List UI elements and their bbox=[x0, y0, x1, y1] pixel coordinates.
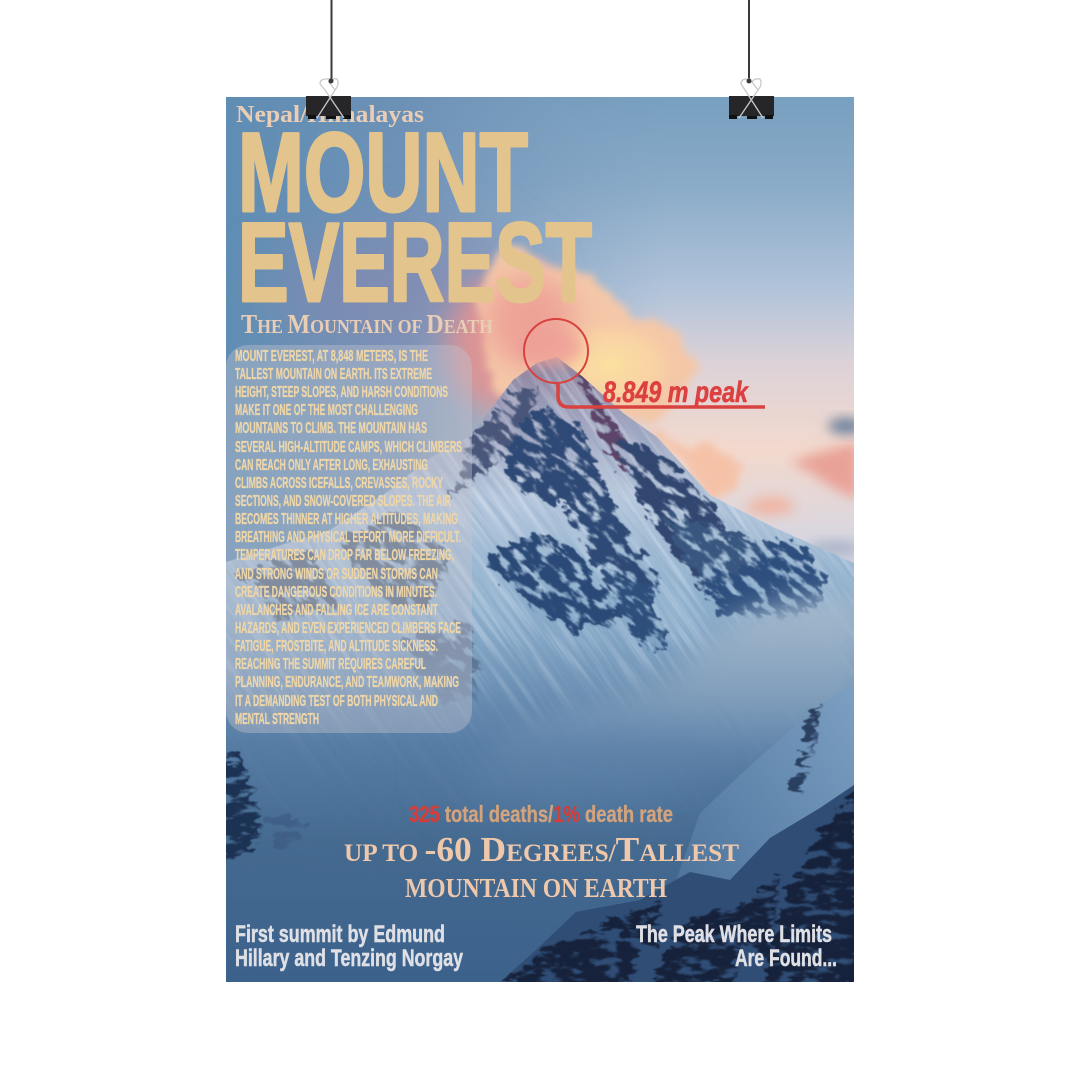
left foreground rock bbox=[226, 757, 310, 860]
binder clip left bbox=[306, 78, 351, 119]
body text: FATIGUE, FROSTBITE, AND ALTITUDE SICKNESS. bbox=[235, 638, 438, 655]
right foreground mountain bbox=[500, 680, 860, 985]
hanging string left bbox=[330, 0, 332, 82]
body text: HEIGHT, STEEP SLOPES, AND HARSH CONDITIONS bbox=[235, 384, 448, 401]
hanging string right bbox=[748, 0, 750, 82]
body text: SECTIONS, AND SNOW-COVERED SLOPES. THE AIR bbox=[235, 493, 451, 510]
body text: HAZARDS, AND EVEN EXPERIENCED CLIMBERS FACE bbox=[235, 620, 461, 637]
body text: IT A DEMANDING TEST OF BOTH PHYSICAL AND bbox=[235, 693, 438, 710]
temperature and height headline: MOUNTAIN ON EARTH bbox=[405, 873, 667, 903]
body text: CAN REACH ONLY AFTER LONG, EXHAUSTING bbox=[235, 457, 428, 474]
first summit note: Hillary and Tenzing Norgay bbox=[235, 945, 463, 972]
poster bbox=[226, 97, 854, 982]
body text: CLIMBS ACROSS ICEFALLS, CREVASSES, ROCKY bbox=[235, 475, 443, 492]
body text: TALLEST MOUNTAIN ON EARTH. ITS EXTREME bbox=[235, 366, 432, 383]
text panel bbox=[226, 345, 472, 733]
body text: AND STRONG WINDS OR SUDDEN STORMS CAN bbox=[235, 566, 438, 583]
body text: MENTAL STRENGTH bbox=[235, 711, 319, 728]
peak haze bbox=[514, 330, 582, 366]
body text: SEVERAL HIGH-ALTITUDE CAMPS, WHICH CLIMBERS bbox=[235, 439, 462, 456]
peak callout bbox=[524, 319, 765, 409]
title: EVEREST bbox=[238, 200, 592, 325]
first summit note bbox=[235, 921, 463, 972]
statistics line: 325 total deaths/1% death rate bbox=[409, 801, 673, 827]
first summit note: First summit by Edmund bbox=[235, 921, 445, 948]
location label: Nepal/Himalayas bbox=[236, 102, 424, 128]
tagline: Are Found... bbox=[735, 945, 837, 972]
title bbox=[242, 131, 592, 304]
body text: BREATHING AND PHYSICAL EFFORT MORE DIFFICULT. bbox=[235, 529, 461, 546]
body text: MOUNTAINS TO CLIMB. THE MOUNTAIN HAS bbox=[235, 420, 427, 437]
sunset clouds bbox=[447, 242, 864, 555]
body text: BECOMES THINNER AT HIGHER ALTITUDES, MAKING bbox=[235, 511, 458, 528]
mountain: Everest bbox=[226, 357, 854, 722]
tagline bbox=[636, 924, 836, 966]
body text: TEMPERATURES CAN DROP FAR BELOW FREEZING, bbox=[235, 547, 454, 564]
subtitle: THE MOUNTAIN OF DEATH bbox=[241, 309, 493, 339]
body text: MOUNT EVEREST, AT 8,848 METERS, IS THE bbox=[235, 348, 428, 365]
temperature and height headline: UP TO -60 DEGREES/TALLEST bbox=[344, 830, 739, 869]
body text bbox=[235, 348, 462, 728]
binder clip right bbox=[729, 78, 774, 119]
temperature and height headline bbox=[344, 838, 739, 898]
tagline: The Peak Where Limits bbox=[636, 921, 832, 948]
fog bbox=[226, 598, 860, 982]
body text: AVALANCHES AND FALLING ICE ARE CONSTANT bbox=[235, 602, 438, 619]
title: MOUNT bbox=[238, 110, 528, 235]
body text: CREATE DANGEROUS CONDITIONS IN MINUTES. bbox=[235, 584, 437, 601]
peak callout: 8.849 m peak bbox=[603, 376, 749, 409]
body text: PLANNING, ENDURANCE, AND TEAMWORK, MAKING bbox=[235, 674, 459, 691]
body text: MAKE IT ONE OF THE MOST CHALLENGING bbox=[235, 402, 418, 419]
body text: REACHING THE SUMMIT REQUIRES CAREFUL bbox=[235, 656, 426, 673]
